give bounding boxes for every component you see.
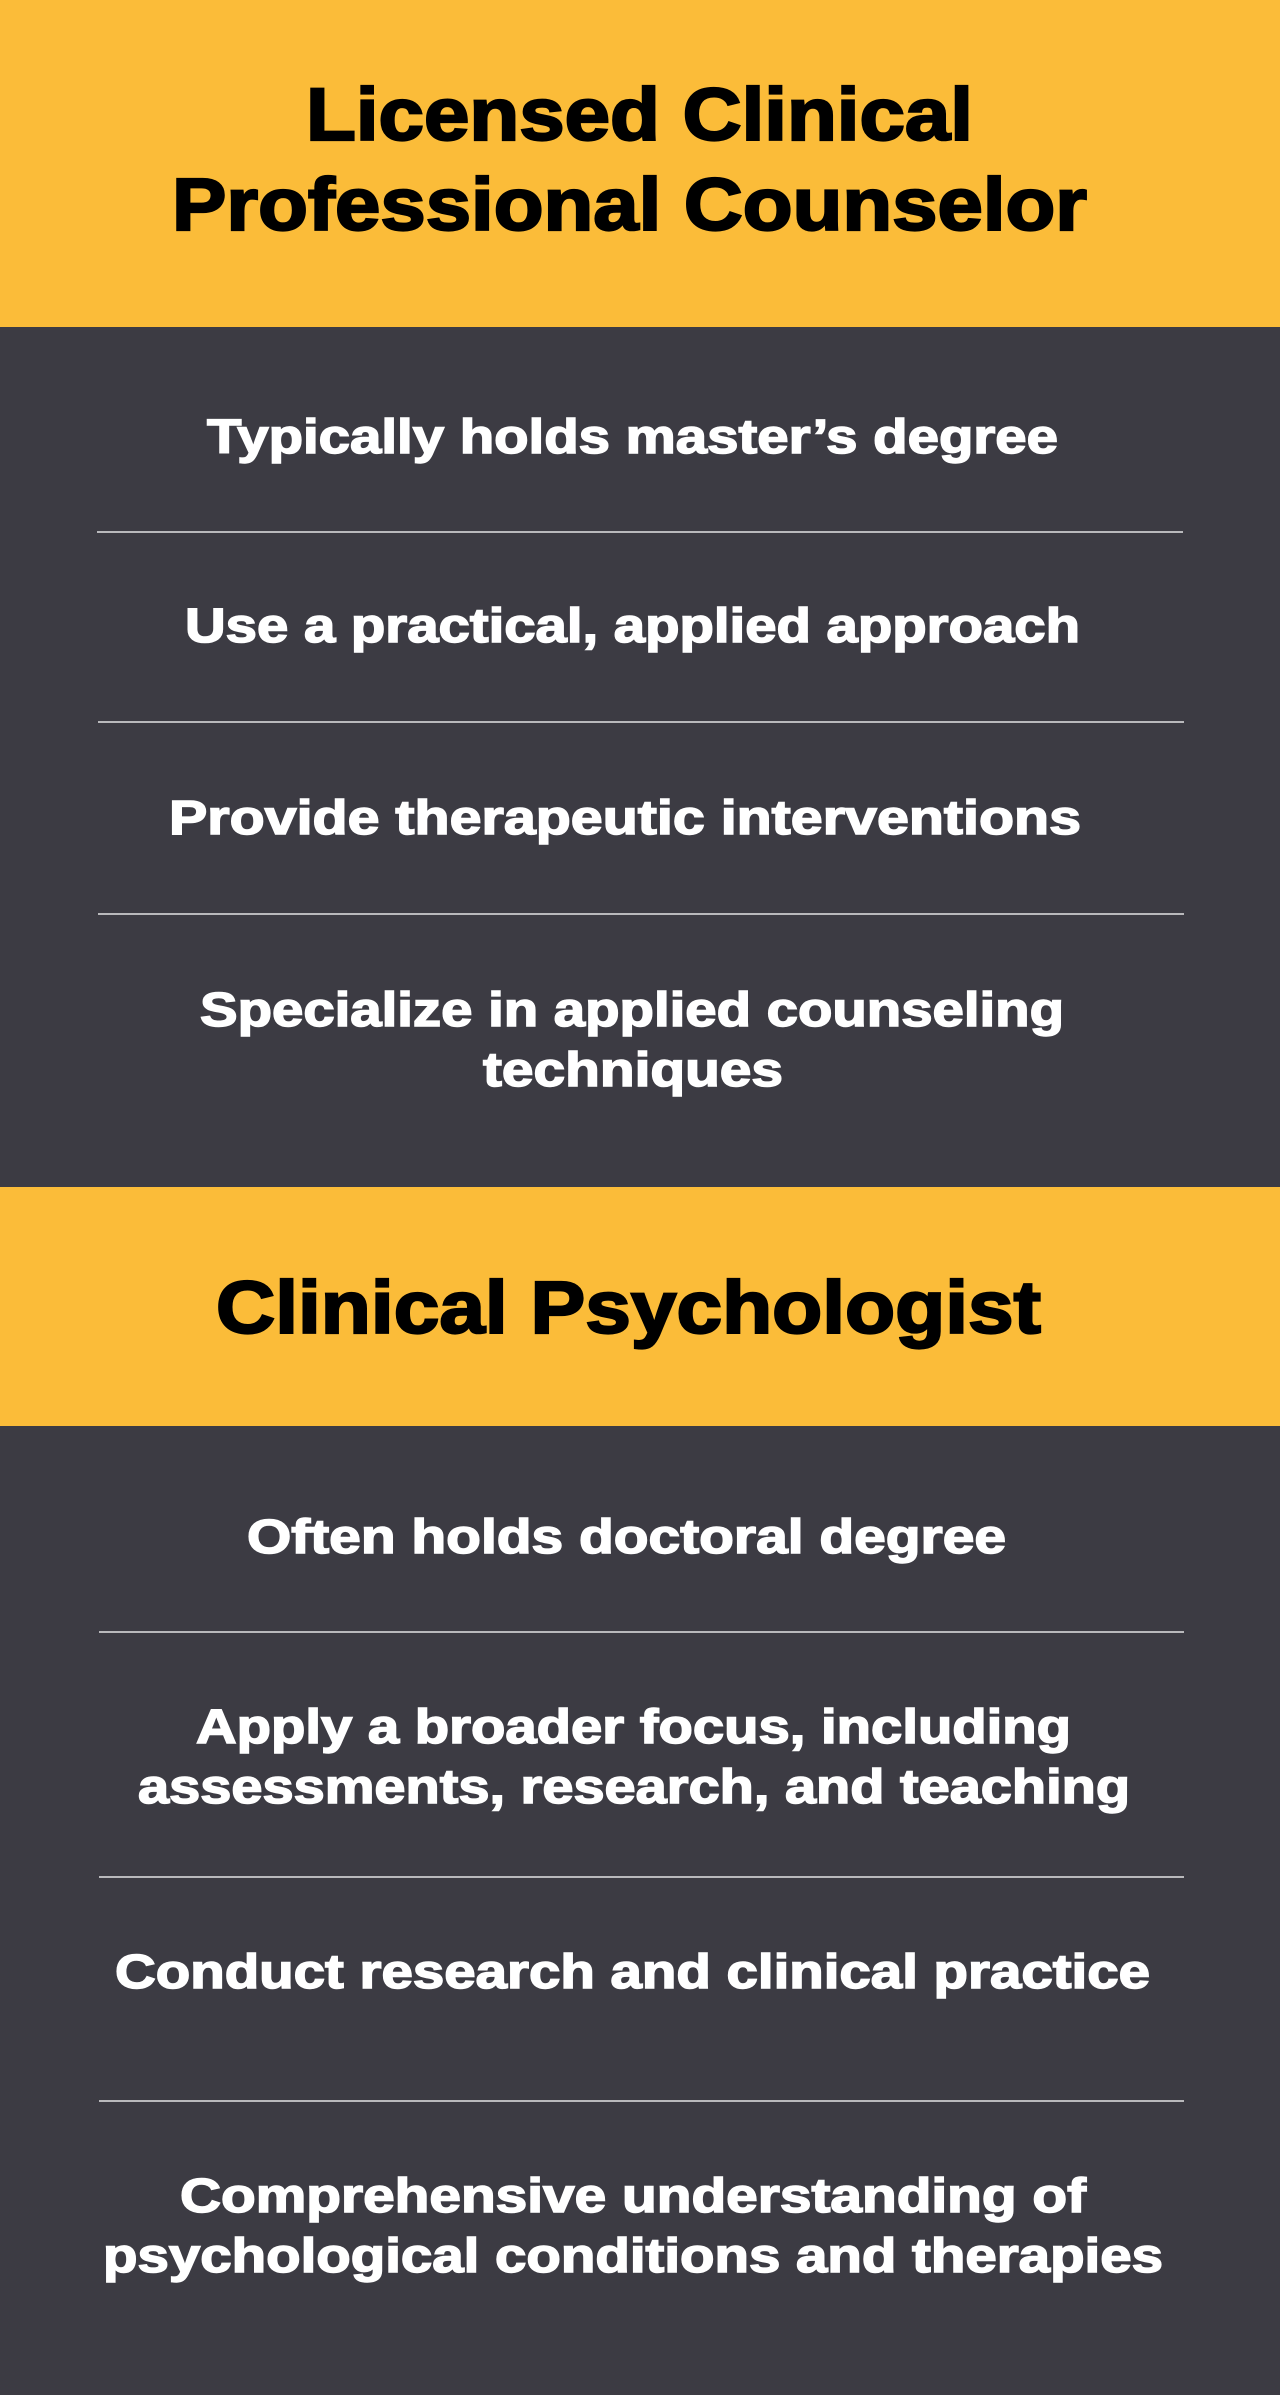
text: applied counseling techniques: techniques <box>483 1044 783 1097</box>
text: research and clinical practice: Conduct research and clinical practice <box>115 1946 1150 1999</box>
text: broader focus: assessments, research, and teaching <box>138 1761 1130 1814</box>
text: comprehensive understanding <box>103 2170 1163 2283</box>
text: applied counseling techniques <box>200 984 1064 1097</box>
heading: Licensed Clinical Professional Counselor: Professional Counselor <box>172 163 1087 246</box>
text: applied counseling techniques: Specialize in applied counseling <box>200 984 1064 1037</box>
text: comprehensive understanding: psychological conditions and therapies <box>103 2230 1163 2283</box>
heading: Clinical Psychologist: Clinical Psychologist <box>216 1266 1041 1349</box>
text: broader focus <box>138 1701 1130 1814</box>
text: broader focus: Apply a broader focus, including <box>196 1701 1071 1754</box>
panel: counselor traits <box>0 327 1280 1186</box>
panel: psychologist traits <box>0 1426 1280 2395</box>
heading: Licensed Clinical Professional Counselor: Licensed Clinical <box>306 73 973 156</box>
text: comprehensive understanding: Comprehensive understanding of <box>180 2170 1087 2223</box>
text: therapeutic interventions: Provide therapeutic interventions <box>169 792 1081 845</box>
panel: psychologist header <box>0 1187 1280 1426</box>
heading: Licensed Clinical Professional Counselor <box>172 73 1087 246</box>
text: practical approach: Use a practical, applied approach <box>185 600 1080 653</box>
panel: counselor header <box>0 0 1280 327</box>
text: master's degree: Typically holds master’s degree <box>207 411 1058 464</box>
text: doctoral degree: Often holds doctoral degree <box>247 1511 1006 1564</box>
